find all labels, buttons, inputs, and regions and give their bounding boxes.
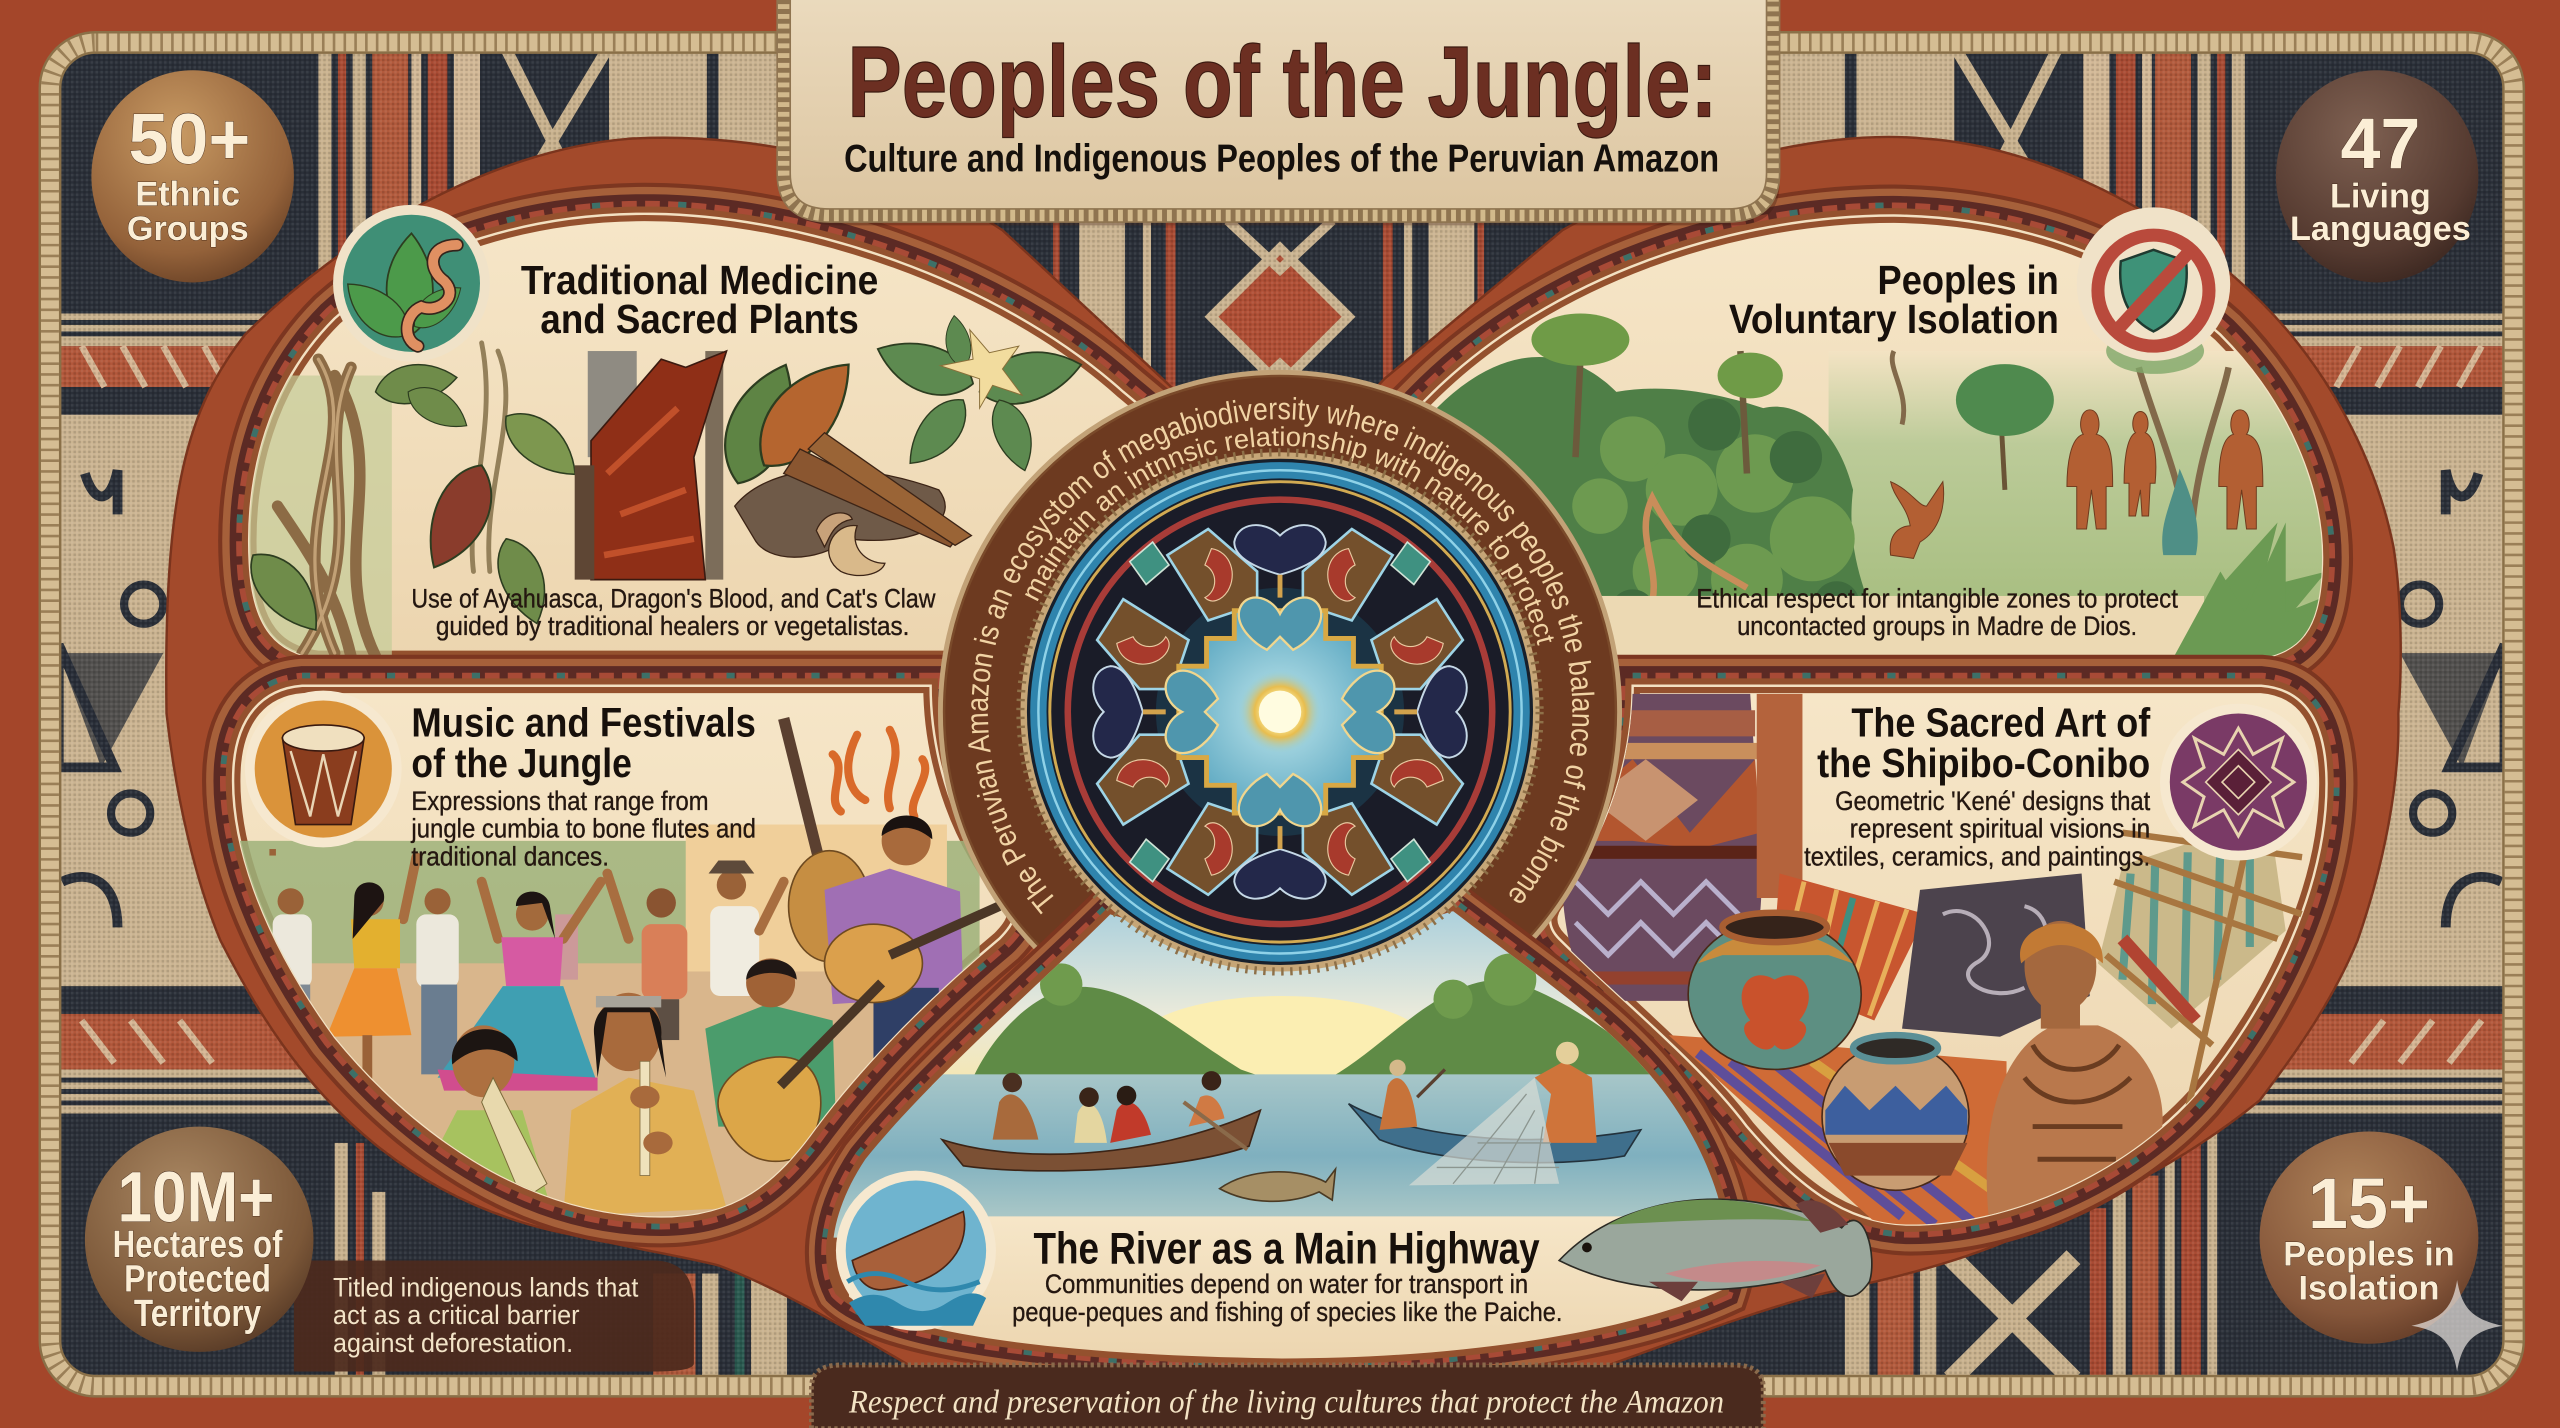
description: Communities depend on water for transport in	[1045, 1269, 1528, 1299]
illustration: forest and uncontacted people	[1437, 314, 2322, 656]
heading: Peoples in	[1878, 257, 2059, 303]
stat: 15+ peoples in isolation: 15+	[2308, 1164, 2430, 1244]
heading: Music and Festivals	[411, 699, 756, 745]
panel: sacred art of the Shipibo-Conibo: textiles, ceramics, and paintings.	[1804, 841, 2150, 871]
heading: The River as a Main Highway	[1033, 1225, 1540, 1274]
panel: voluntary isolation: uncontacted groups in Madre de Dios.	[1737, 611, 2137, 641]
illustration: ceramics, textiles, woman, loom	[1562, 694, 2302, 1225]
small fish	[1220, 1169, 1336, 1201]
vines	[278, 343, 506, 656]
panel: traditional medicine: and Sacred Plants	[540, 296, 859, 342]
stat: 50+ ethnic groups: 50+	[128, 99, 250, 179]
bark pile	[735, 433, 971, 576]
illustration: river scene	[816, 906, 1747, 1363]
guitarist in green	[705, 958, 882, 1161]
icon: canoe on water	[836, 1171, 996, 1331]
icon: sparkle watermark	[2411, 1280, 2503, 1372]
description: Geometric 'Kené' designs that	[1835, 786, 2151, 816]
banner: closing message: Respect and preservation of the living cultures that protect the Amazon	[848, 1384, 1724, 1420]
panel: voluntary isolation	[1417, 216, 2335, 686]
title: Peoples of the Jungle:	[847, 26, 1718, 139]
callout: titled indigenous lands: act as a critical barrier	[333, 1300, 580, 1330]
stepped cross and sun	[1166, 597, 1394, 826]
stat: 10M+ hectares: Protected	[124, 1258, 271, 1300]
center top textile with diamond	[1004, 220, 1559, 498]
stat: 50+ ethnic groups: Groups	[127, 210, 249, 248]
music notes	[833, 730, 925, 816]
eight stippled blocks with hooks	[1093, 525, 1467, 899]
panel: river as a highway: peque-peques and fishing of species like the Paiche.	[1012, 1297, 1562, 1327]
pot with teal and orange design	[1688, 913, 1861, 1069]
stat: 15+ peoples in isolation: Peoples in	[2283, 1235, 2455, 1273]
panel: music and festivals: jungle cumbia to bone flutes and	[411, 814, 756, 844]
striped textile	[1771, 874, 1927, 1020]
curved ring text: maintain an intnnsic relationship with nature to protect	[1025, 426, 1554, 646]
illustration: sacred plants	[237, 314, 1087, 661]
description: Use of Ayahuasca, Dragon's Blood, and Cat's Claw	[411, 583, 936, 613]
curved ring text: The Peruvian Amazon is an ecosystom of megabiodiversity where indigenous peoples the balance of the biome	[968, 397, 1594, 914]
flutist in yellow	[563, 993, 727, 1216]
panel: river as a highway	[816, 906, 1872, 1363]
panel: sacred art of the Shipibo-Conibo: the Shipibo-Conibo	[1817, 740, 2150, 786]
bottom left textile stripes	[335, 1143, 787, 1380]
stat: 50+ ethnic groups	[91, 70, 294, 282]
stat: 15+ peoples in isolation: Isolation	[2299, 1270, 2439, 1308]
stat: 47 living languages: Living	[2330, 177, 2431, 215]
heading: Traditional Medicine	[521, 257, 878, 303]
brown text ring around the mandala	[940, 372, 1620, 1051]
dancer: orange skirt	[327, 882, 411, 1092]
stat: 47 living languages: Languages	[2290, 210, 2471, 248]
illustration: musicians and dancers	[229, 718, 999, 1225]
subtitle: Culture and Indigenous Peoples of the Peruvian Amazon	[844, 137, 1719, 180]
icon: no-entry shield	[2077, 207, 2230, 361]
title plaque	[784, 0, 1780, 225]
guitarist in purple	[824, 816, 999, 1069]
icon: leaves and snake	[333, 205, 490, 362]
banner: closing message	[811, 1365, 1763, 1428]
panel: traditional medicine	[237, 214, 1143, 661]
stat: 10M+ hectares	[85, 1127, 313, 1352]
stat: 15+ peoples in isolation	[2260, 1131, 2478, 1344]
stat: 10M+ hectares: Territory	[134, 1292, 261, 1334]
callout: titled indigenous lands: Titled indigenous lands that	[333, 1272, 639, 1302]
panel: music and festivals: of the Jungle	[411, 740, 632, 786]
description: Expressions that range from	[411, 786, 709, 816]
panel: sacred art of the Shipibo-Conibo: represent spiritual visions in	[1850, 814, 2150, 844]
panel: sacred art of the Shipibo-Conibo	[1550, 686, 2327, 1225]
stat: 10M+ hectares: 10M+	[118, 1157, 274, 1237]
fishing boat and net	[1349, 1042, 1641, 1185]
bottom right textile stripes and X motif	[1845, 1127, 2217, 1380]
mandala: Kené design	[1020, 452, 1540, 971]
back dancers	[269, 849, 784, 1074]
description: Ethical respect for intangible zones to protect	[1696, 583, 2178, 613]
stat: 47 living languages	[2276, 70, 2478, 282]
panel: music and festivals: traditional dances.	[411, 841, 609, 871]
flower plant	[869, 314, 1087, 476]
dancer: pink top and blue skirt	[438, 892, 598, 1091]
woman with body paint	[1987, 921, 2163, 1216]
panel: music and festivals	[229, 686, 1014, 1225]
heading: The Sacred Art of	[1851, 699, 2151, 745]
stat: 47 living languages: 47	[2340, 104, 2420, 184]
large patterned vase	[1562, 694, 1762, 1001]
girl with pan flute	[442, 1025, 548, 1196]
callout: titled indigenous lands	[294, 1260, 694, 1372]
dark painted cloth	[1902, 874, 2090, 1037]
loom	[2098, 816, 2302, 1110]
stat: 50+ ethnic groups: Ethnic	[135, 176, 240, 214]
striped rug	[1669, 1035, 2007, 1225]
callout: titled indigenous lands: against deforestation.	[333, 1328, 573, 1358]
icon: kene pattern	[2160, 704, 2317, 860]
stat: 10M+ hectares: Hectares of	[113, 1223, 283, 1265]
icon: drum	[245, 691, 402, 847]
guitar behind	[784, 718, 870, 962]
canoe with passengers	[942, 1071, 1260, 1171]
tree with dragon's blood sap	[575, 351, 727, 580]
panel: traditional medicine: guided by traditional healers or vegetalistas.	[436, 611, 909, 641]
figures	[1890, 410, 2263, 558]
panel: voluntary isolation: Voluntary Isolation	[1729, 296, 2059, 342]
rust lobed backing shape	[166, 137, 2401, 1368]
geometric pot	[1822, 1035, 1969, 1190]
arapaima fish	[1559, 1199, 1872, 1301]
